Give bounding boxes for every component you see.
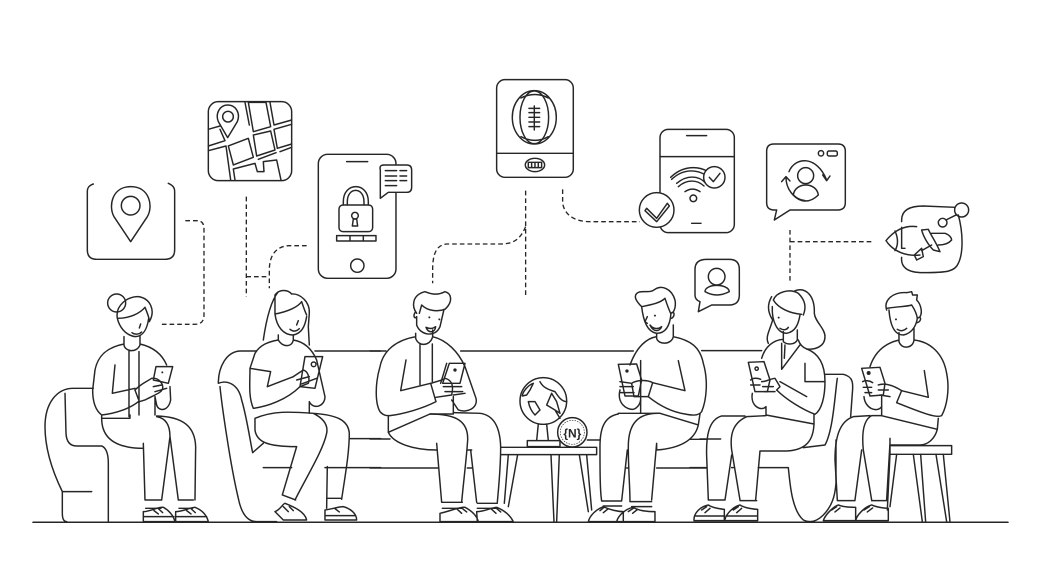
face details: [132, 324, 142, 334]
person 1: woman with bun: [93, 294, 208, 522]
hand: [431, 378, 465, 397]
face: [772, 307, 800, 333]
icon card: football tablet: [497, 80, 573, 177]
stool: [887, 446, 952, 522]
user: [798, 168, 814, 184]
icon card: phone with wifi: [639, 129, 734, 233]
laces: [529, 106, 540, 130]
phone: [300, 357, 323, 388]
legs and shoes: [102, 416, 196, 508]
shoes: [588, 507, 655, 522]
shoes: [823, 505, 888, 521]
person 5: woman with wavy hair: [694, 290, 825, 521]
phone: [748, 362, 770, 392]
sofa right arm: [690, 351, 853, 522]
person 4: man facing left: [588, 288, 706, 522]
armchair left: [45, 388, 108, 522]
password bar: [337, 236, 376, 241]
hair: [767, 290, 825, 349]
shoes: [694, 505, 758, 521]
legs: [707, 416, 814, 501]
football: [512, 91, 556, 144]
face: [642, 307, 674, 333]
face: [889, 310, 921, 335]
rotating arrows: [782, 161, 830, 201]
face: [414, 309, 444, 334]
shoes: [275, 503, 357, 520]
torso: [870, 328, 948, 429]
icon card: location pin: [87, 183, 175, 259]
wifi arcs: [671, 168, 710, 192]
icon card: camera chat bubble with user: [767, 144, 845, 220]
dashed connector: football to person 3: [433, 191, 526, 297]
hand: [751, 378, 780, 392]
hand and arm: [619, 380, 653, 409]
hair: [886, 292, 921, 318]
legs: [600, 413, 698, 507]
ground line: [33, 521, 1008, 523]
shoes: [440, 507, 513, 522]
hand: [135, 378, 167, 402]
torso: [618, 325, 706, 425]
chat bubble: [380, 165, 412, 198]
torso and collar: [752, 330, 825, 424]
rocket: [914, 229, 952, 260]
pin glyph: [111, 187, 150, 242]
hand: [293, 370, 317, 387]
nodes: [955, 203, 969, 217]
dashed connector: map and lock phone to person 2: [246, 197, 307, 297]
dashed connector: camera bubble to person 5: [790, 230, 873, 283]
globe on stand: [520, 378, 567, 447]
small badge: [525, 158, 545, 172]
legs: [388, 413, 501, 508]
padlock: [343, 187, 368, 205]
side table: [501, 447, 597, 522]
chat bubble: user profile: [695, 259, 739, 312]
large check badge: [639, 193, 674, 227]
armchair and sofa left section: [218, 351, 381, 522]
map pin: [217, 105, 238, 138]
small check badge: [704, 167, 725, 188]
legs: [255, 412, 349, 508]
torso and arms: [250, 335, 325, 413]
award badge: [558, 418, 587, 447]
hand and arm: [863, 381, 902, 410]
hair: [635, 288, 675, 313]
face details: [290, 321, 299, 331]
hair bun: [108, 294, 126, 312]
icon card: map: [208, 102, 292, 181]
football shape: [886, 226, 920, 255]
icon card: phone with padlock: [318, 154, 412, 278]
torso and jacket: [93, 336, 171, 418]
icon card: rocket and node: [886, 203, 969, 273]
torso and jacket: [376, 330, 476, 432]
sofa centre: [370, 351, 721, 468]
phone: [153, 367, 173, 383]
map blocks: [208, 102, 292, 180]
phone: [618, 364, 642, 396]
person 3: man facing right: [376, 292, 513, 522]
hair: [414, 292, 451, 313]
dashed connector: wifi phone: [563, 189, 640, 222]
head and hair: [263, 290, 309, 345]
globe stand: [527, 424, 560, 447]
person 2: woman with long hair: [250, 290, 357, 520]
continents: [522, 382, 567, 418]
award badge: {N}: [563, 427, 582, 441]
phone: [862, 367, 885, 396]
head and hair: [117, 297, 152, 337]
speaker and home button: [347, 159, 368, 164]
legs: [835, 416, 937, 501]
dashed connector: pin card to person 1: [161, 221, 204, 324]
phone: [441, 363, 465, 383]
person 6: man on stool: [823, 292, 948, 521]
